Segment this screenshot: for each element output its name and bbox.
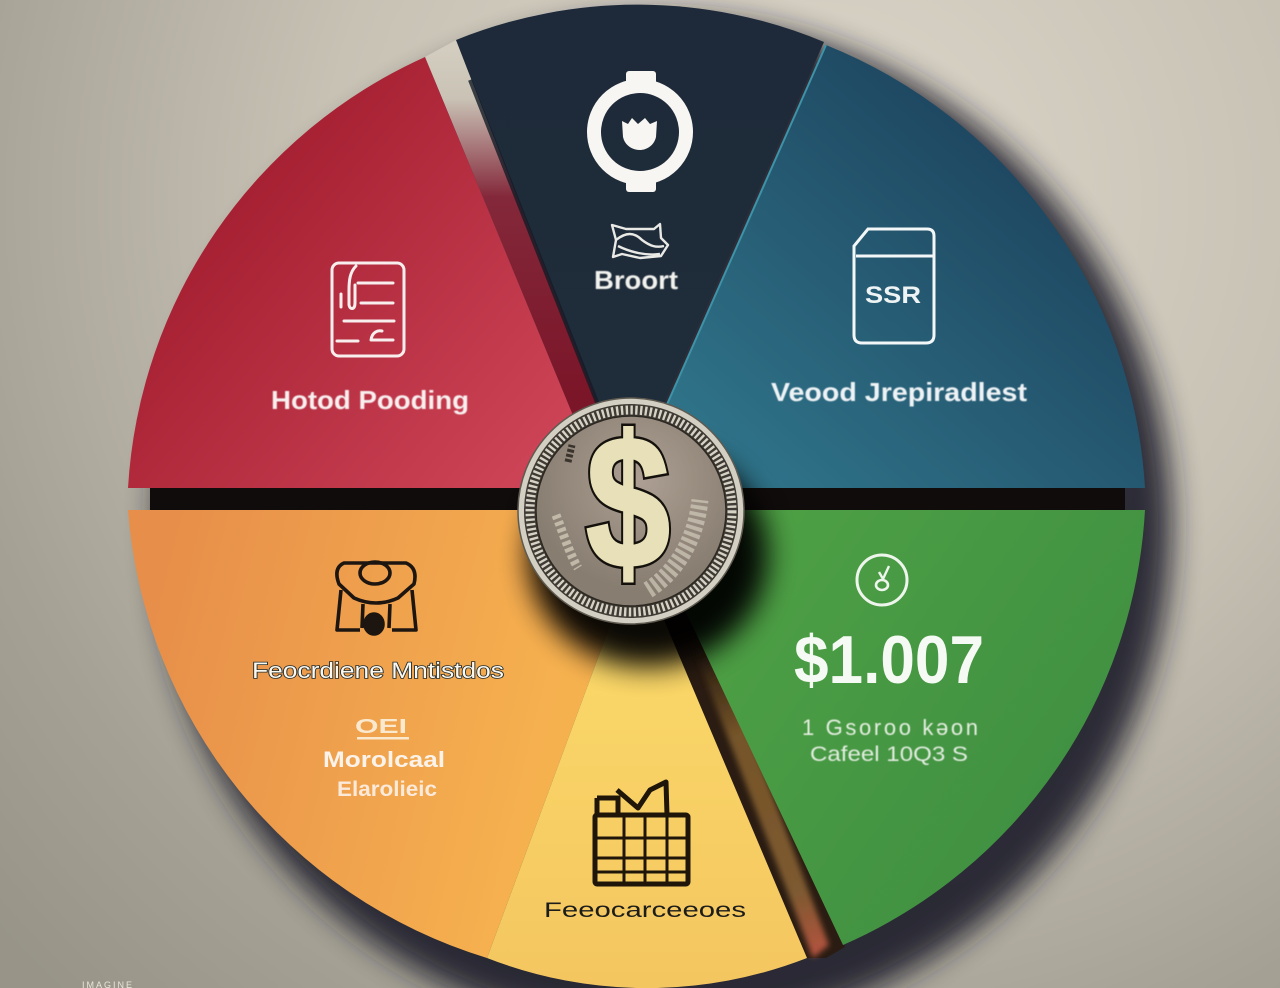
value: $1.007: $1.007 <box>794 622 984 698</box>
dollar sign: $ <box>586 397 670 607</box>
label: Hotod Pooding: Hotod Pooding <box>271 385 469 415</box>
brown edge highlight <box>694 650 829 958</box>
navy dark left edge <box>470 80 600 410</box>
yellow wedge <box>487 620 807 988</box>
red wedge <box>128 57 603 488</box>
panel: dark red side edge <box>425 40 612 488</box>
panel: orange segment <box>128 510 620 958</box>
orange wedge <box>128 510 620 958</box>
panel: navy segment <box>456 5 824 480</box>
icon: document <box>332 263 404 356</box>
text: caption line two: Cafeel 10Q3 S <box>810 743 968 766</box>
label: small code with underline <box>355 716 409 740</box>
label: Broort: Broort <box>594 265 678 295</box>
navy wedge <box>456 5 824 480</box>
icon: calendar grid with check <box>595 782 688 884</box>
coin engraving top <box>568 445 572 462</box>
black centre band <box>150 484 1125 514</box>
dollar sign: $ <box>586 397 670 607</box>
coin shadow <box>528 443 768 667</box>
label: Elarolieic: Elarolieic <box>337 778 437 801</box>
icon: SSR card: SSR <box>865 282 921 309</box>
teal wedge <box>630 45 1145 488</box>
icon: pouch with face <box>337 562 416 634</box>
panel: red segment <box>128 57 603 488</box>
icon: circle with check <box>857 555 907 605</box>
panel: green segment <box>650 510 1145 945</box>
coin rim <box>518 398 744 624</box>
icon: watch ring with shield <box>594 71 686 192</box>
coin reeded edge <box>530 410 732 612</box>
label: Veood Jrepiradlest: Veood Jrepiradlest <box>771 377 1027 407</box>
pie drop shadow <box>156 18 1172 988</box>
green wedge <box>650 510 1145 945</box>
coin engraving left <box>556 515 578 568</box>
panel: brown side edge <box>664 620 845 958</box>
text: caption line one: 1 Gsoroo kəon <box>802 715 978 740</box>
panel: yellow segment <box>487 620 807 988</box>
icon: small banknote <box>612 224 668 258</box>
icon: SSR card <box>854 229 934 343</box>
coin engraving right <box>648 500 700 590</box>
label: Feocrdiene Mntistdos: Feocrdiene Mntistdos <box>252 658 504 683</box>
label: small code with underline: OEI <box>355 716 407 738</box>
panel: teal segment <box>630 45 1145 488</box>
label: Morolcal: Morolcaal <box>323 747 445 772</box>
label: Feeocarceeoes: Feeocarceeoes <box>544 898 746 922</box>
coin <box>518 397 744 624</box>
brown edge base <box>664 620 845 958</box>
teal bright edge <box>630 45 826 488</box>
coin face <box>536 416 726 606</box>
